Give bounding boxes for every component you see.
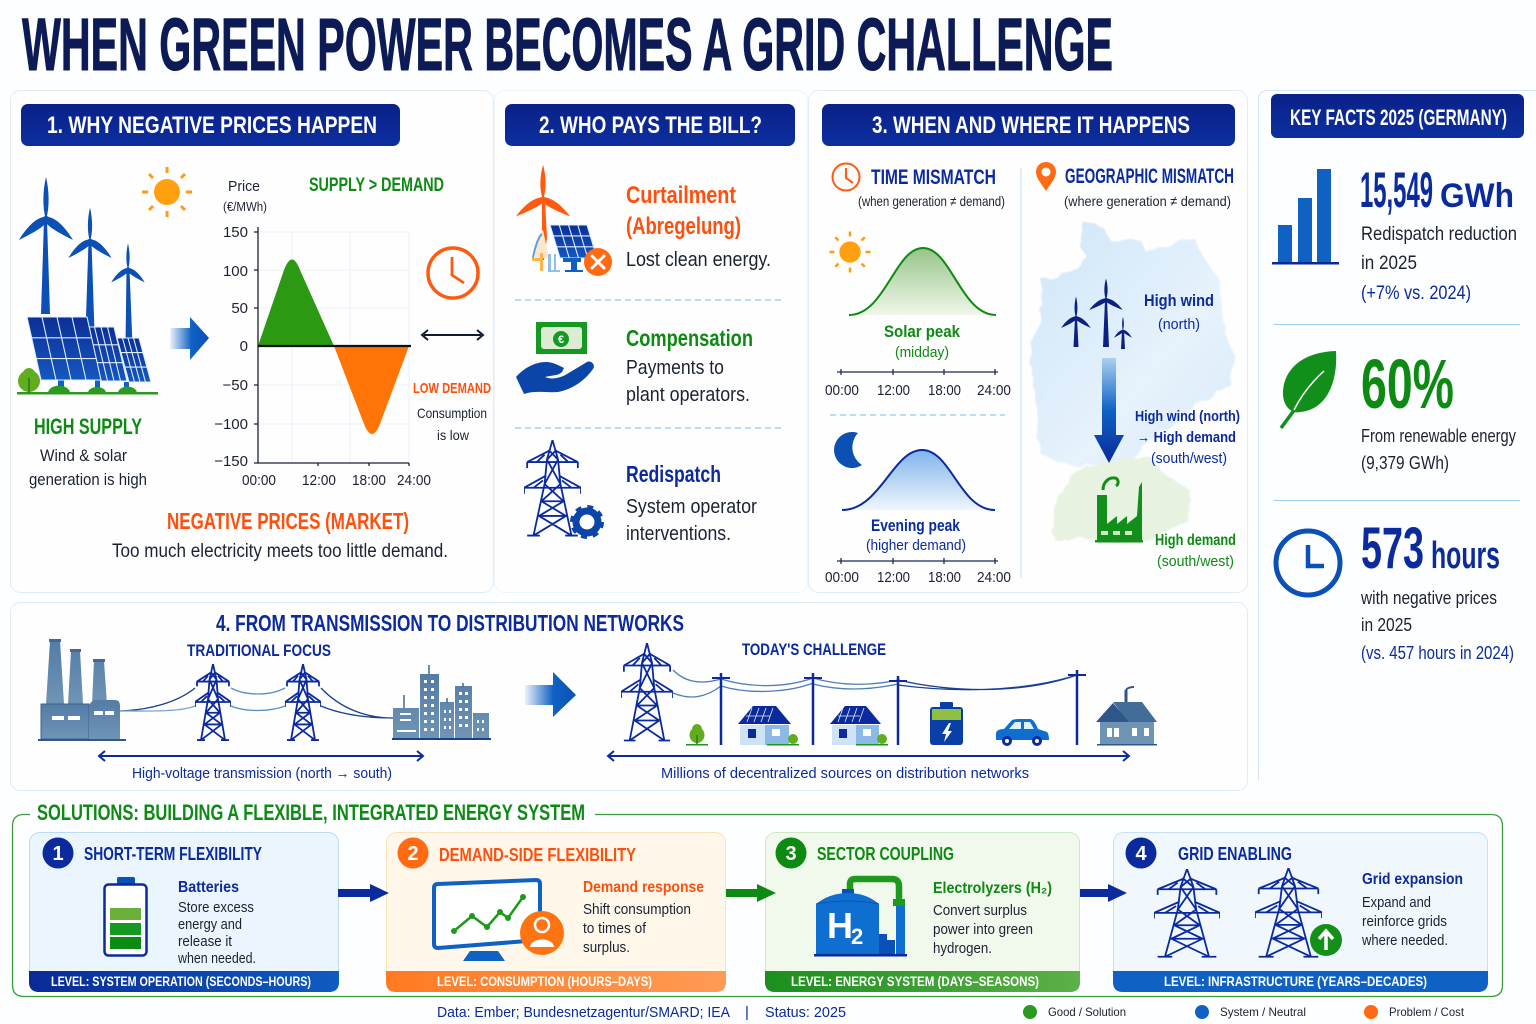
card 2: demand-side flexibility [386,832,726,992]
icon: battery [930,702,963,745]
card 3: sector coupling: SECTOR COUPLING [817,844,954,864]
fact: redispatch: (+7% vs. 2024) [1361,282,1471,304]
solar peak curve: 12:00 [877,382,910,399]
fact: hours: hours [1431,535,1500,577]
card 1: short-term flexibility: SHORT-TERM FLEXIBILITY [84,844,262,864]
arrow: double [422,330,483,340]
fact: hours [1360,516,1514,663]
compensation text [626,325,753,406]
double arrow and label: distribution: Millions of decentralized sources on distribution networks [661,765,1029,782]
compensation text: plant operators. [626,384,750,406]
solutions frame and title [12,800,1502,996]
icon: conventional house [1096,687,1157,746]
transmission lines [120,688,393,718]
curtailment text: (Abregelung) [626,213,741,240]
source line: Status: 2025 [765,1004,846,1021]
card 4: grid enabling: LEVEL: INFRASTRUCTURE (YEARS–DECADES) [1164,974,1427,989]
geographic mismatch header: GEOGRAPHIC MISMATCH [1065,165,1234,188]
card 4: grid enabling: where needed. [1361,933,1448,949]
card 4: grid enabling: 4 [1135,843,1147,865]
evening peak curve: 18:00 [928,569,961,586]
label: high supply: HIGH SUPPLY [34,414,142,439]
label: flow: (south/west) [1151,451,1227,467]
label: high wind north: High wind [1144,291,1214,310]
label: high demand: (south/west) [1157,554,1234,570]
fact: redispatch [1360,162,1517,304]
heading 1 [21,104,400,146]
label: high demand: High demand [1155,532,1236,549]
compensation text: Compensation [626,325,753,351]
card 2: demand-side flexibility: Demand response [583,879,704,896]
icon: north turbines [1061,278,1132,349]
price chart: 150 [223,224,248,241]
card 4: grid enabling: GRID ENABLING [1178,844,1292,864]
label: low demand: Consumption [417,405,487,421]
source line: | [745,1004,749,1021]
towers [195,664,321,740]
icon: city [392,665,491,740]
evening peak curve: 00:00 [825,569,859,586]
panel: who pays the bill [494,90,808,592]
card 3: sector coupling: power into green [933,922,1033,938]
heading 2 [505,104,795,146]
panel: transmission to distribution [10,602,1248,790]
time mismatch header [832,164,1005,209]
card 3: sector coupling: hydrogen. [933,941,992,957]
card 1: short-term flexibility: Batteries [178,879,239,896]
icon: solar house 1 [738,706,799,746]
icon: compensation: € [558,334,564,346]
fact: redispatch: in 2025 [1361,252,1417,274]
redispatch text: System operator [626,496,757,518]
time mismatch header: TIME MISMATCH [871,166,996,189]
label: high demand [1155,532,1236,570]
fact: hours: in 2025 [1361,614,1412,635]
label: low demand [413,380,491,443]
distribution lines and poles [621,643,1086,745]
label: high supply [29,414,147,489]
icon: factory [1095,478,1143,542]
card 3: sector coupling: Electrolyzers (H₂) [933,880,1052,897]
icon: electrolyzer tank [814,879,907,956]
card 1: short-term flexibility: 1 [52,843,64,865]
label: flow [1135,408,1240,467]
price chart: −100 [214,416,248,433]
heading 3: 3. WHEN AND WHERE IT HAPPENS [872,112,1190,139]
negative prices caption: NEGATIVE PRICES (MARKET) [167,508,409,534]
fact: renewable [1361,345,1517,473]
card 1: short-term flexibility: energy and [178,917,242,933]
label: flow: → High demand [1137,429,1236,446]
negative prices caption: Too much electricity meets too little demand. [112,541,448,562]
card 2: demand-side flexibility: DEMAND-SIDE FLEXIBILITY [439,845,636,865]
icon: compensation [516,322,594,394]
card 4: grid enabling [1113,832,1488,992]
arrow: supply to chart [170,317,209,360]
evening peak curve: 12:00 [877,569,910,586]
label: supply greater than demand: SUPPLY > DEMAND [309,175,444,196]
icon: bars [1272,169,1339,264]
label: flow: High wind (north) [1135,408,1240,425]
icon: electric car [996,719,1049,746]
icon: electrolyzer tank: H [827,905,853,946]
card 2: demand-side flexibility: Shift consumption [583,902,691,918]
price chart: (€/MWh) [223,200,267,214]
redispatch text: interventions. [626,523,731,545]
evening peak curve: (higher demand) [866,537,966,554]
fact: renewable: 60% [1361,345,1454,423]
solar peak curve: (midday) [895,344,949,361]
card 2: demand-side flexibility: surplus. [583,940,630,956]
arrow: north to south [1094,358,1124,463]
icon: wind turbines and solar panels [17,177,158,394]
curtailment text: Curtailment [626,182,736,209]
source line: Data: Ember; Bundesnetzagentur/SMARD; IEA [437,1004,730,1021]
icon: sun [142,167,192,217]
curtailment text: Lost clean energy. [626,249,771,271]
fact: hours: with negative prices [1360,587,1497,608]
price chart: −150 [214,453,248,470]
solar peak curve: Solar peak [884,322,960,341]
legend: System / Neutral [1220,1005,1306,1019]
fact: redispatch: GWh [1440,177,1514,215]
redispatch text: Redispatch [626,461,721,487]
arrow: card 2 to 3 [726,884,776,902]
double arrow and label: high voltage [99,751,423,782]
label: today's challenge: TODAY'S CHALLENGE [742,640,886,659]
card 3: sector coupling: Convert surplus [933,903,1027,919]
card 4: grid enabling: reinforce grids [1362,914,1447,930]
double arrow and label: distribution [608,751,1129,782]
fact: renewable: (9,379 GWh) [1361,452,1449,473]
arrow: card 3 to 4 [1080,884,1127,902]
card 1: short-term flexibility: release it [178,934,232,950]
heading: key facts [1271,94,1524,138]
card 1: short-term flexibility [29,832,339,992]
heading 4: 4. FROM TRANSMISSION TO DISTRIBUTION NETWORKS [216,610,684,636]
price chart: −50 [223,377,248,394]
label: high wind north: (north) [1158,316,1200,333]
icon: battery bars [104,877,146,956]
card 1: short-term flexibility: when needed. [177,951,256,967]
icon: power plant [38,639,126,741]
panel: why negative prices happen [10,90,494,592]
card 2: demand-side flexibility: LEVEL: CONSUMPTION (HOURS–DAYS) [437,974,652,989]
card 4: grid enabling: Expand and [1362,895,1431,911]
heading 3 [822,104,1235,146]
icon: redispatch tower and gear [524,440,602,537]
legend: Good / Solution [1048,1005,1126,1019]
curtailment text [626,182,771,271]
solar peak curve: 24:00 [977,382,1011,399]
evening peak curve: 24:00 [977,569,1011,586]
map of Germany [1030,222,1235,543]
icon: clock blue [1276,531,1340,595]
geographic mismatch header: (where generation ≠ demand) [1064,193,1231,209]
icon: curtailment [516,165,612,276]
panel: when and where it happens [808,90,1248,592]
redispatch text [626,461,757,545]
heading 2: 2. WHO PAYS THE BILL? [539,112,762,139]
card 3: sector coupling [765,832,1080,992]
icon: towers with upgrade badge [1154,868,1342,957]
card 3: sector coupling: 3 [785,843,797,865]
geographic mismatch header [1036,162,1234,209]
icon: clock [428,248,478,298]
fact: redispatch: 15,549 [1360,162,1433,218]
label: low demand: LOW DEMAND [413,380,491,397]
price chart: Price [228,178,260,195]
label: high wind north [1144,291,1214,333]
arrow: card 1 to 2 [338,884,389,902]
legend: Problem / Cost [1389,1005,1465,1019]
double arrow and label: high voltage: High-voltage transmission (north → south) [132,765,392,782]
time mismatch header: (when generation ≠ demand) [858,193,1005,209]
legend [1023,1005,1465,1019]
icon: electrolyzer tank: 2 [851,924,863,949]
card 2: demand-side flexibility: 2 [407,843,419,865]
icon: leaf [1281,351,1336,428]
icon: solar house 2 [830,706,888,746]
heading 1: 1. WHY NEGATIVE PRICES HAPPEN [47,112,377,139]
price chart: 100 [223,263,248,280]
price chart: 12:00 [302,472,336,489]
label: high supply: Wind & solar [40,446,127,465]
label: traditional focus: TRADITIONAL FOCUS [187,641,331,660]
label: high supply: generation is high [29,470,147,489]
icon: monitor with demand chart [434,880,564,961]
evening peak curve: Evening peak [871,516,960,535]
price chart: 0 [240,338,248,355]
arrow: transmission to distribution [525,672,576,717]
fact: hours: 573 [1361,516,1424,581]
price chart: 50 [231,300,248,317]
card 3: sector coupling: LEVEL: ENERGY SYSTEM (DAYS–SEASONS) [791,974,1039,989]
solar peak curve [825,232,1011,399]
label: low demand: is low [437,427,470,443]
card 1: short-term flexibility: Store excess [178,900,254,916]
card 2: demand-side flexibility: to times of [583,921,647,937]
solar peak curve: 00:00 [825,382,859,399]
price chart: 24:00 [397,472,431,489]
price chart [214,178,431,489]
compensation text: Payments to [626,357,724,379]
evening peak curve [825,432,1011,586]
icon: tree [686,724,708,746]
negative prices caption [112,508,448,562]
panel: key facts [1258,90,1536,780]
solar peak curve: 18:00 [928,382,961,399]
solutions frame and title: SOLUTIONS: BUILDING A FLEXIBLE, INTEGRATED ENERGY SYSTEM [37,800,585,825]
card 4: grid enabling: Grid expansion [1362,871,1463,888]
price chart: 18:00 [352,472,386,489]
price chart: 00:00 [242,472,276,489]
card 1: short-term flexibility: LEVEL: SYSTEM OPERATION (SECONDS–HOURS) [51,974,311,989]
